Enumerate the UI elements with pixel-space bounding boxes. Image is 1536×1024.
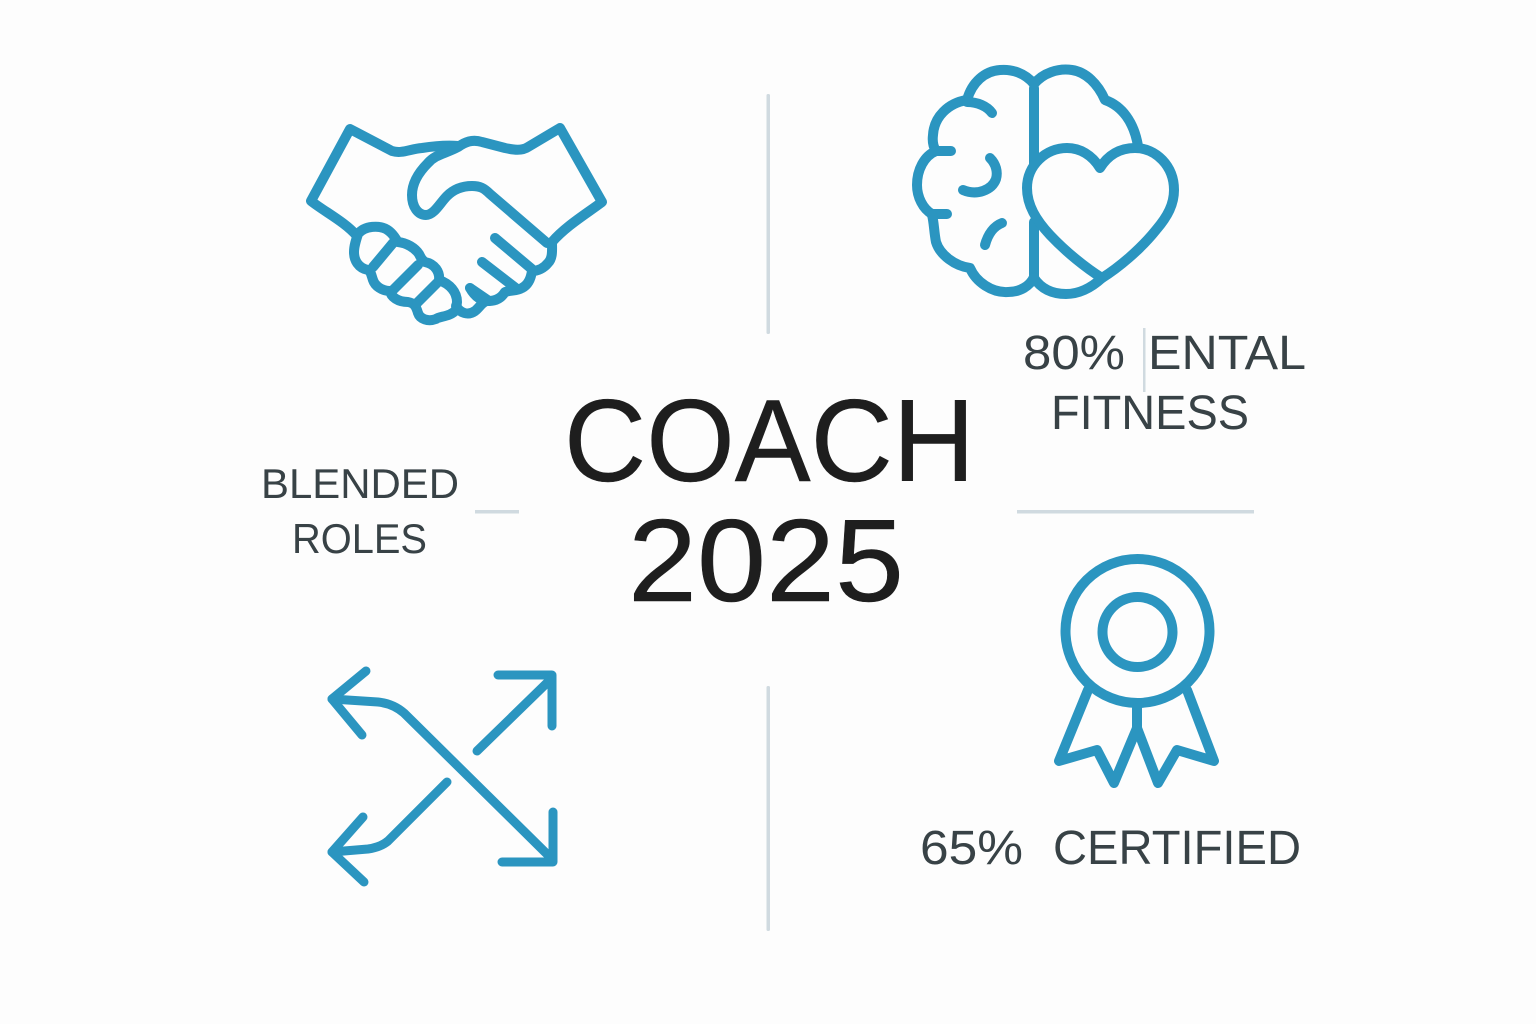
title: COACH 2025: 2025 bbox=[628, 495, 904, 626]
icon: handshake bbox=[311, 128, 602, 320]
label: 65% certified bbox=[920, 822, 1301, 875]
icon: crossing arrows bbox=[332, 671, 553, 882]
label: 80% mental fitness: ENTAL bbox=[1148, 327, 1306, 380]
icon: brain with heart bbox=[917, 70, 1174, 294]
label: 65% certified: 65% bbox=[920, 822, 1023, 875]
label: blended roles: BLENDED bbox=[261, 460, 459, 507]
label: 65% certified: CERTIFIED bbox=[1053, 822, 1301, 875]
label: 80% mental fitness bbox=[1023, 327, 1306, 440]
title: COACH 2025: COACH bbox=[564, 375, 975, 506]
label: 80% mental fitness: FITNESS bbox=[1051, 387, 1249, 440]
label: blended roles: ROLES bbox=[292, 515, 427, 562]
label: blended roles bbox=[261, 460, 459, 562]
title: COACH 2025 bbox=[564, 375, 975, 626]
icon: award ribbon bbox=[1059, 559, 1214, 783]
label: 80% mental fitness: 80% bbox=[1023, 327, 1125, 380]
